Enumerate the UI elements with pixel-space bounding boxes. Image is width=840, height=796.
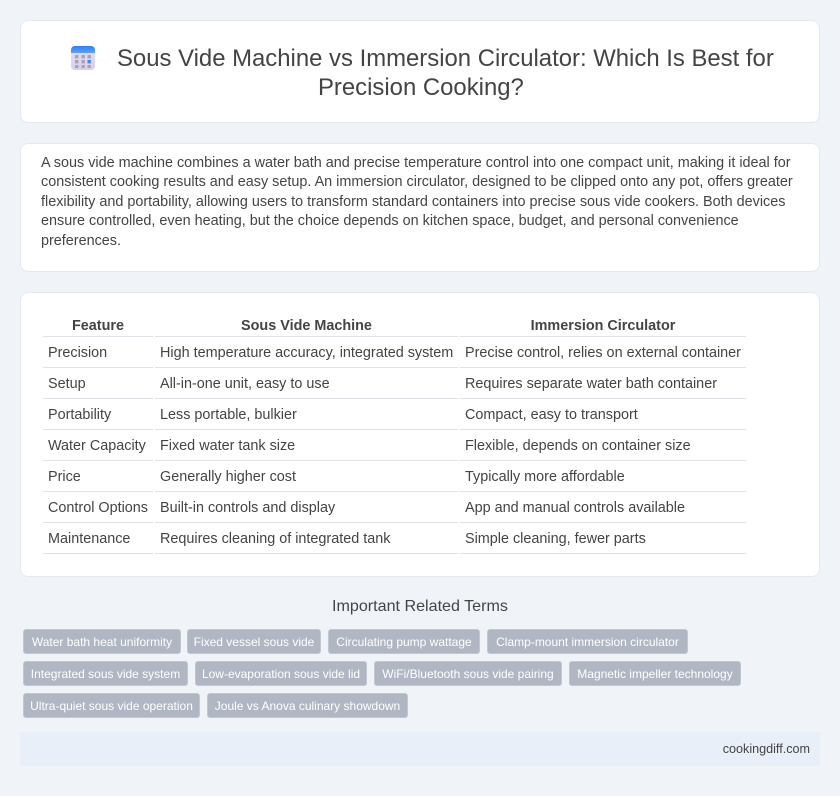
related terms tags: WiFi/Bluetooth sous vide pairing [382, 667, 554, 681]
related terms tags: Circulating pump wattage [336, 635, 472, 649]
comparison table: Control Options [48, 500, 148, 516]
intro text: flexibility and portability, allowing users to transform standard containers into precise sous vide cookers. Both devices [41, 194, 785, 210]
related terms tags: Magnetic impeller technology [577, 667, 733, 681]
comparison table: Feature [72, 318, 124, 334]
comparison table: Setup [48, 376, 86, 392]
comparison table: Flexible, depends on container size [465, 438, 691, 454]
title: Precision Cooking? [318, 74, 524, 101]
intro text: ensure controlled, even heating, but the choice depends on kitchen space, budget, and personal convenience [41, 213, 739, 229]
icon: calendar [71, 46, 95, 70]
comparison table: Requires cleaning of integrated tank [160, 531, 390, 547]
related terms tags: Clamp-mount immersion circulator [496, 635, 679, 649]
related terms tags: Ultra-quiet sous vide operation [30, 699, 193, 713]
comparison table: High temperature accuracy, integrated system [160, 345, 453, 361]
comparison table: Built-in controls and display [160, 500, 335, 516]
related terms tags: Water bath heat uniformity [32, 635, 172, 649]
comparison table: Precision [48, 345, 107, 361]
intro text [41, 155, 793, 249]
intro card [20, 143, 820, 272]
comparison table: All-in-one unit, easy to use [160, 376, 330, 392]
related terms tags [23, 629, 741, 718]
title: Sous Vide Machine vs Immersion Circulator: Which Is Best for [117, 45, 774, 72]
related terms heading: Important Related Terms [332, 597, 508, 615]
comparison table: Water Capacity [48, 438, 146, 454]
related terms tags: Fixed vessel sous vide [194, 635, 314, 649]
comparison table: Typically more affordable [465, 469, 625, 485]
comparison table: Immersion Circulator [531, 318, 675, 334]
comparison table [43, 318, 746, 554]
header card [20, 20, 820, 123]
footer bar [20, 732, 820, 766]
comparison table: Requires separate water bath container [465, 376, 717, 392]
related terms tags: Joule vs Anova culinary showdown [215, 699, 400, 713]
comparison table: App and manual controls available [465, 500, 685, 516]
comparison table: Simple cleaning, fewer parts [465, 531, 646, 547]
comparison table: Portability [48, 407, 111, 423]
intro text: consistent cooking results and easy setup. An immersion circulator, designed to be clipped onto any pot, offers greater [41, 174, 793, 190]
comparison table: Generally higher cost [160, 469, 296, 485]
comparison table: Fixed water tank size [160, 438, 295, 454]
title [117, 45, 774, 101]
comparison table: Price [48, 469, 81, 485]
related terms tags: Integrated sous vide system [31, 667, 180, 681]
comparison table: Sous Vide Machine [241, 318, 372, 334]
comparison table: Maintenance [48, 531, 130, 547]
comparison table: Compact, easy to transport [465, 407, 638, 423]
intro text: preferences. [41, 233, 121, 249]
comparison table: Precise control, relies on external container [465, 345, 741, 361]
intro text: A sous vide machine combines a water bath and precise temperature control into one compact unit, making it ideal for [41, 155, 791, 171]
comparison table card [20, 292, 820, 577]
related terms tags: Low-evaporation sous vide lid [202, 667, 360, 681]
comparison table: Less portable, bulkier [160, 407, 297, 423]
footer source: cookingdiff.com [723, 742, 810, 756]
